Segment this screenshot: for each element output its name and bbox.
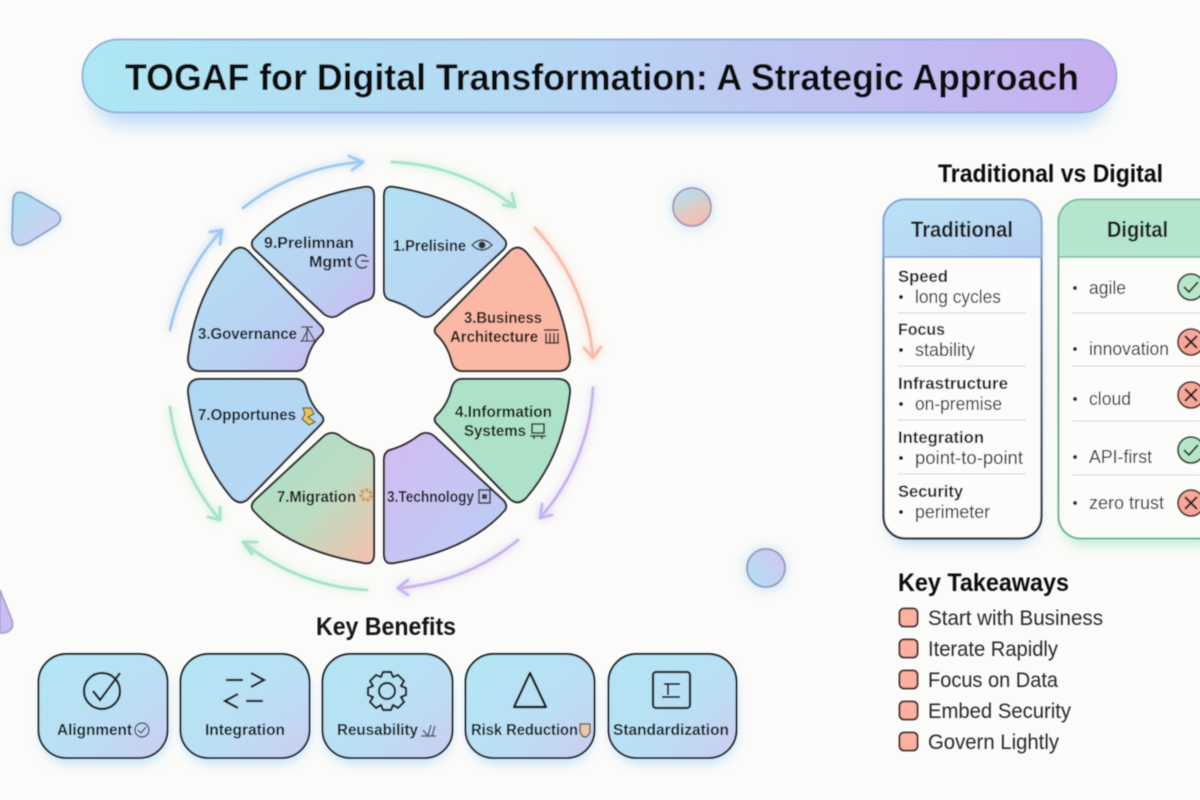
icon: eye [472,240,492,250]
panel: digital [1058,200,1200,546]
segment: technology: 3.Technology [387,489,474,506]
icon: two-way arrows [225,673,264,708]
section: key benefits [38,613,737,764]
rows: traditional: long cycles [915,287,1001,307]
arrow: purple bottom [398,540,518,595]
rows: traditional: on-premise [915,394,1002,414]
icon: shield [580,724,590,737]
segment: opportunities: 7.Opportunes [198,407,296,424]
arrow: purple right [540,388,593,518]
section: key takeaways [898,569,1103,754]
icon: standard frame [653,672,690,708]
icon: recycle mark [421,725,436,736]
section: comparison [884,160,1200,546]
header: traditional [884,200,1042,257]
ADM cycle wheel [188,187,570,563]
arrow: green left [170,407,220,520]
card: integration: Integration [205,722,285,739]
card: integration [180,654,310,764]
title banner [82,40,1116,126]
card: standardization [608,654,737,764]
rows: digital: innovation [1089,339,1169,359]
segment: governance: 3.Governance [198,326,297,343]
rows: digital: agile [1089,278,1126,298]
icon: cycle [356,255,369,268]
icon: chip [479,490,490,503]
rows: traditional [898,267,1026,522]
card: risk reduction: Risk Reduction [471,722,578,739]
segment: preliminary mgmt: Mgmt [309,254,353,271]
segment: migration: 7.Migration [277,489,356,506]
icon: cross cloud [1178,382,1200,408]
icon: check api [1178,437,1200,463]
rows: digital: API-first [1089,447,1152,467]
panel: traditional [884,200,1042,546]
icon: gear [368,672,406,710]
segment: preliminary: 1.Prelisine [393,238,466,255]
card: alignment: Alignment [57,722,133,739]
segment: business architecture [435,248,570,371]
segment: governance [188,248,323,371]
segment: information systems: 4.Information [455,404,552,421]
icon: triangle [514,673,546,707]
arrow: blue top [243,156,363,208]
rows: traditional: Infrastructure [898,374,1008,393]
segment: preliminary mgmt [252,187,374,317]
segment: information systems: Systems [464,423,526,440]
takeaway: iterate rapidly: Iterate Rapidly [928,638,1058,661]
rows: digital [1072,278,1200,513]
takeaway: govern lightly: Govern Lightly [928,731,1059,754]
arrow: blue left [170,230,222,330]
arrow: green top [392,162,515,207]
rows: traditional: Speed [898,267,948,286]
segment: information systems [435,379,570,502]
title text: TOGAF for Digital Transformation: A Strategic Approach [125,57,1079,98]
card: alignment [38,654,168,764]
icon: computer [530,424,546,439]
icon: cross zero trust [1178,490,1200,516]
icon: scales [300,327,315,341]
segment: opportunities [188,379,323,502]
decorative circle: violet [744,547,788,591]
heading: key benefits: Key Benefits [316,613,456,641]
decorative triangle: bottom left [0,590,13,633]
icon: cross innovation [1178,329,1200,355]
header: digital: Digital [1107,217,1168,242]
rows: digital: cloud [1089,389,1131,409]
card: reusability [322,654,452,764]
takeaway: start with business: Start with Business [928,607,1103,630]
takeaway: focus on data: Focus on Data [928,669,1058,692]
rows: traditional: stability [915,340,975,360]
rows: traditional: point-to-point [915,448,1023,468]
header: traditional: Traditional [911,217,1013,242]
arrow: orange [535,228,601,358]
rows: digital: zero trust [1089,493,1164,513]
icon: small check [135,723,149,737]
segment: preliminary mgmt: 9.Prelimnan [264,235,354,252]
rows: traditional: Integration [898,428,984,447]
icon: check circle [84,673,120,709]
rows: traditional: Focus [898,320,945,339]
segment: business architecture: 3.Business [464,310,542,327]
segment: preliminary [384,187,506,317]
icon: check agile [1178,274,1200,300]
header: digital [1058,200,1200,257]
heading: key takeaways: Key Takeaways [898,569,1069,597]
segment: technology [384,433,506,563]
cycle arrows [170,156,601,595]
icon: opportunity cluster [302,408,315,425]
card: risk reduction [466,654,594,764]
rows: traditional: perimeter [915,502,990,522]
icon: building [544,330,559,343]
decorative circle: orange [670,186,714,230]
arrow: green bottom [243,542,367,590]
takeaway: embed security: Embed Security [928,700,1071,723]
segment: migration [252,433,374,563]
heading: traditional vs digital: Traditional vs Digital [938,160,1163,188]
card: reusability: Reusability [337,722,418,739]
icon: migration gear [361,490,371,500]
segment: business architecture: Architecture [450,329,538,346]
decorative triangle: left [12,192,60,245]
rows: traditional: Security [898,482,964,501]
card: standardization: Standardization [613,722,729,739]
